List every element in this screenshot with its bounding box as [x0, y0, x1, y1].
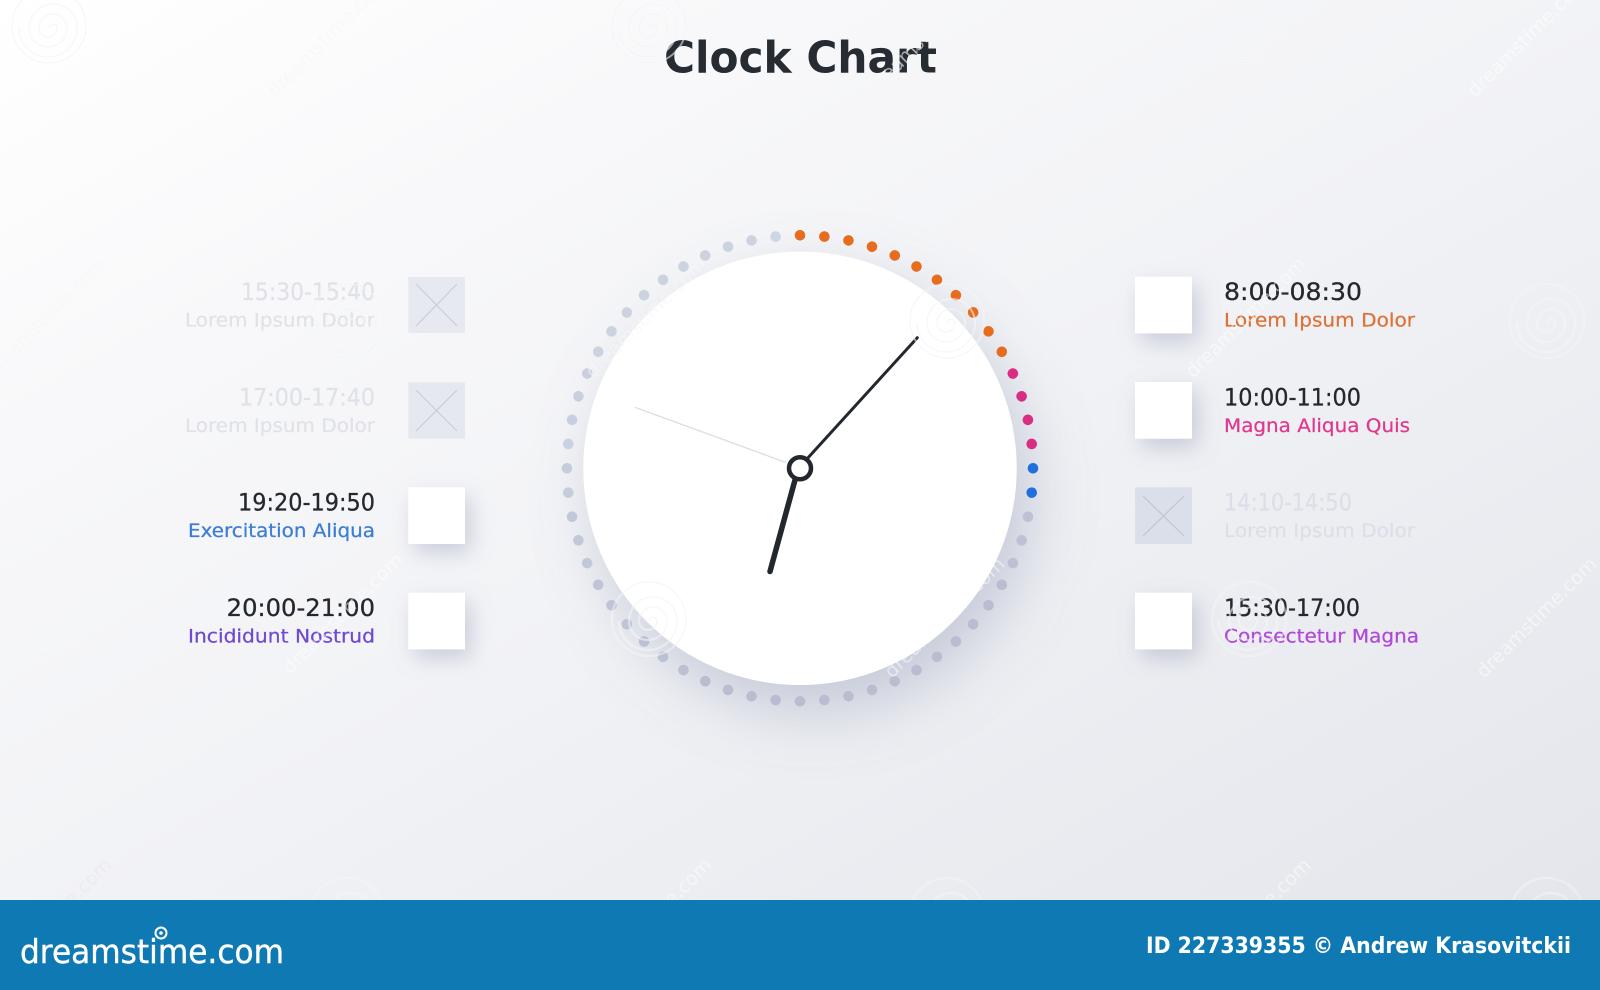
- item: 20:00-21:00: [188, 593, 465, 649]
- time: 10:00-11:00: [1224, 383, 1361, 411]
- placeholder box: [408, 277, 465, 333]
- label: Lorem Ipsum Dolor: [1224, 520, 1415, 542]
- label: Lorem Ipsum Dolor: [185, 310, 375, 332]
- white box: [1135, 382, 1192, 439]
- label: Exercitation Aliqua: [188, 520, 375, 542]
- footer bar: [0, 900, 1600, 990]
- item: 8:00-08:30: [1135, 277, 1415, 333]
- watermark pattern: dreamstime.com: [587, 854, 716, 983]
- item: 15:30-17:00: [1135, 593, 1419, 649]
- white box: [408, 487, 465, 544]
- hour hand: [770, 480, 795, 572]
- item: 19:20-19:50: [188, 487, 465, 544]
- title: Clock Chart: [664, 32, 937, 84]
- panel: clock: [562, 230, 1038, 707]
- placeholder box: [1135, 487, 1192, 544]
- time: 8:00-08:30: [1224, 278, 1362, 306]
- second hand: [635, 407, 786, 462]
- label: Lorem Ipsum Dolor: [185, 415, 375, 437]
- item: 10:00-11:00: [1135, 382, 1410, 439]
- white box: [408, 593, 465, 649]
- time: 14:10-14:50: [1224, 489, 1352, 517]
- label: Incididunt Nostrud: [188, 626, 375, 648]
- item: 15:30-15:40: [185, 277, 465, 333]
- footer logo: dreamstime.com: [20, 932, 284, 971]
- time: 15:30-15:40: [241, 278, 375, 306]
- time: 17:00-17:40: [239, 383, 375, 411]
- minute dots ring: [562, 230, 1038, 707]
- label: Lorem Ipsum Dolor: [1224, 310, 1415, 332]
- watermark pattern: dreamstime.com: [581, 253, 710, 382]
- watermark pattern: dreamstime.com: [278, 549, 407, 678]
- white box: [1135, 593, 1192, 649]
- footer credit: ID 227339355 © Andrew Krasovitckii: [1146, 934, 1571, 959]
- placeholder box: [408, 382, 465, 439]
- watermark pattern: dreamstime.com: [1181, 253, 1310, 382]
- watermark pattern: dreamstime.com: [581, 253, 710, 382]
- minute hand: [806, 338, 917, 460]
- item: 17:00-17:40: [185, 382, 465, 439]
- clock hub: [789, 457, 811, 479]
- watermark pattern: dreamstime.com: [880, 553, 1009, 682]
- label: Magna Aliqua Quis: [1224, 415, 1410, 437]
- watermark pattern: dreamstime.com: [1472, 553, 1600, 682]
- time: 20:00-21:00: [227, 594, 375, 622]
- clock face: [583, 252, 1017, 685]
- time: 19:20-19:50: [238, 489, 375, 517]
- white box: [1135, 277, 1192, 333]
- item: 14:10-14:50: [1135, 487, 1415, 544]
- time: 15:30-17:00: [1224, 594, 1360, 622]
- label: Consectetur Magna: [1224, 626, 1419, 648]
- watermark pattern: dreamstime.com: [1186, 854, 1315, 983]
